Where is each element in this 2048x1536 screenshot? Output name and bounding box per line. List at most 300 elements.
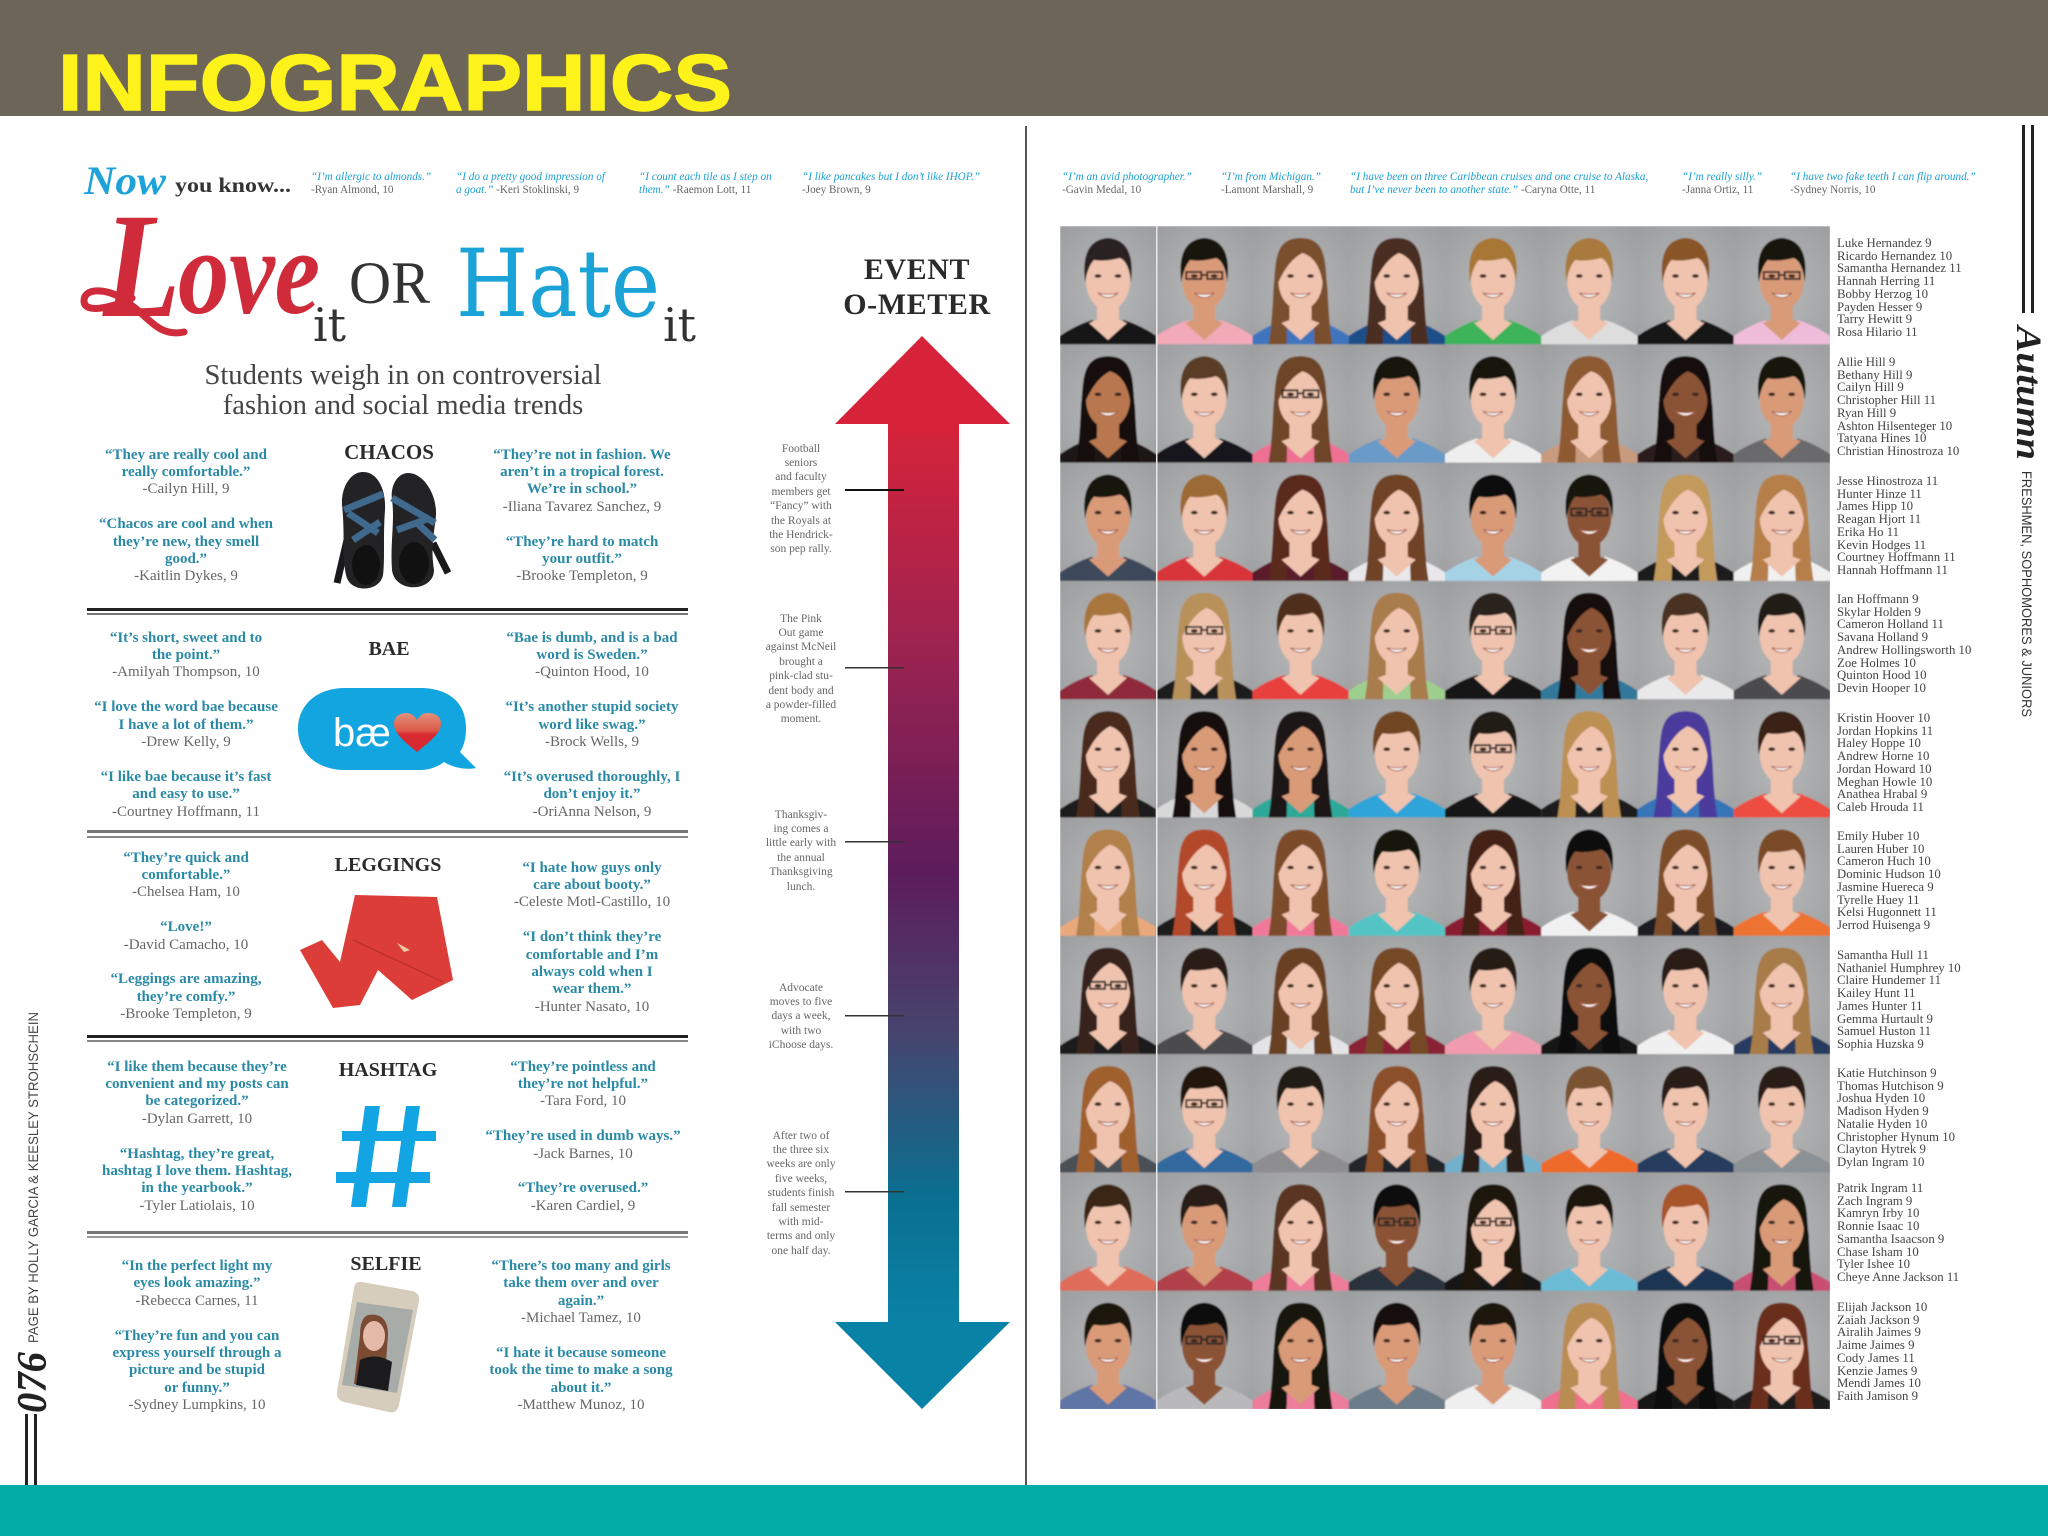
portrait: James Hipp bbox=[1252, 463, 1349, 582]
portrait: Meghan Howle bbox=[1541, 699, 1638, 818]
names row 8: Natalie Hyden 10 bbox=[1837, 1117, 1927, 1131]
names row 8: Christopher Hynum 10 bbox=[1837, 1130, 1955, 1144]
divider bbox=[87, 1035, 688, 1042]
fun fact: Caryna Otte bbox=[1350, 171, 1648, 196]
quotes love: selfie: eyes look amazing.” bbox=[133, 1275, 261, 1291]
names row 7: James Hunter 11 bbox=[1837, 999, 1923, 1013]
names row 2: Ashton Hilsenteger 10 bbox=[1837, 419, 1952, 433]
names row 3: Hunter Hinze 11 bbox=[1837, 487, 1922, 501]
quotes hate: selfie: again.” bbox=[558, 1293, 604, 1309]
names row 5: Anathea Hrabal 9 bbox=[1837, 787, 1927, 801]
portrait: Cameron Holland bbox=[1252, 581, 1349, 700]
quotes hate: chacos: “They’re hard to match bbox=[506, 534, 658, 550]
event note: semester: After two of bbox=[773, 1130, 829, 1142]
main title: Love it or Hate it bbox=[80, 210, 697, 352]
quotes love: chacos: -Cailyn Hill, 9 bbox=[142, 481, 230, 497]
names row 6: Jerrod Huisenga 9 bbox=[1837, 918, 1930, 932]
quotes hate: bae bbox=[504, 630, 680, 820]
quotes hate: chacos: -Brooke Templeton, 9 bbox=[516, 568, 648, 584]
fun fact: Joey Brown: “I like pancakes but I don’t like IHOP.” bbox=[802, 171, 980, 183]
names row 6: Jasmine Huereca 9 bbox=[1837, 880, 1934, 894]
portrait: Cody James bbox=[1445, 1291, 1542, 1410]
names row 4: Savana Holland 9 bbox=[1837, 630, 1928, 644]
names row 9: Zach Ingram 9 bbox=[1837, 1194, 1912, 1208]
names row 7: Claire Hundemer 11 bbox=[1837, 973, 1941, 987]
names row 3 bbox=[1837, 475, 1956, 577]
names row 8: Thomas Hutchison 9 bbox=[1837, 1079, 1944, 1093]
quotes hate: selfie: -Michael Tamez, 10 bbox=[521, 1310, 641, 1326]
portrait: Kailey Hunt bbox=[1349, 936, 1445, 1055]
names row 5: Meghan Howle 10 bbox=[1837, 775, 1932, 789]
portrait: Zoe Holmes bbox=[1541, 581, 1638, 700]
event note: thanksgiving: Thanksgiv- bbox=[775, 808, 827, 820]
divider bbox=[87, 830, 688, 838]
heading: now you know bbox=[83, 158, 291, 203]
names row 1: Luke Hernandez 9 bbox=[1837, 236, 1932, 250]
event note: semester: the three six bbox=[773, 1144, 829, 1156]
quotes love: hashtag: hashtag I love them. Hashtag, bbox=[102, 1163, 292, 1179]
names row 9: Tyler Ishee 10 bbox=[1837, 1257, 1910, 1271]
names row 7: Samuel Huston 11 bbox=[1837, 1024, 1931, 1038]
portrait: Ronnie Isaac bbox=[1349, 1172, 1445, 1291]
portrait: Devin Hooper bbox=[1734, 581, 1830, 700]
fun fact: Sydney Norris bbox=[1790, 171, 1976, 196]
fun fact: Lamont Marshall: -Lamont Marshall, 9 bbox=[1221, 184, 1313, 196]
event note: semester bbox=[766, 1130, 836, 1257]
names row 8: Madison Hyden 9 bbox=[1837, 1104, 1929, 1118]
names row 10: Kenzie James 9 bbox=[1837, 1364, 1917, 1378]
names row 3: Courtney Hoffmann 11 bbox=[1837, 550, 1956, 564]
quotes love: leggings: “They’re quick and bbox=[123, 850, 249, 866]
portrait: Dominic Hudson bbox=[1349, 818, 1445, 936]
quotes hate: leggings: care about booty.” bbox=[533, 877, 651, 893]
quotes hate: bae: “It’s another stupid society bbox=[506, 699, 678, 715]
names row 6 bbox=[1837, 830, 1941, 932]
portrait: Tatyana Hines bbox=[1638, 344, 1734, 463]
quotes love: bae: -Drew Kelly, 9 bbox=[141, 734, 231, 750]
event note: pink out: a powder-filled bbox=[766, 699, 836, 711]
event note: advocate bbox=[769, 982, 833, 1051]
event-o-meter arrow with ticks bbox=[835, 336, 1010, 1409]
names row 1: Ricardo Hernandez 10 bbox=[1837, 249, 1952, 263]
quotes hate: leggings: “I don’t think they’re bbox=[523, 929, 661, 945]
portrait: Jasmine Huereca bbox=[1445, 818, 1542, 936]
names row 9 bbox=[1837, 1182, 1959, 1284]
fun fact: Sydney Norris: -Sydney Norris, 10 bbox=[1790, 184, 1875, 196]
names row 1: Samantha Hernandez 11 bbox=[1837, 261, 1962, 275]
quotes hate: leggings bbox=[514, 860, 670, 1015]
quotes hate: hashtag: they’re not helpful.” bbox=[518, 1076, 648, 1092]
fun fact: Lamont Marshall: “I’m from Michigan.” bbox=[1221, 171, 1321, 183]
subtitle: fashion and social media trends bbox=[223, 390, 583, 421]
quotes love: chacos: good.” bbox=[165, 551, 207, 567]
heading: bae: BAE bbox=[368, 638, 410, 660]
names row 1: Payden Hesser 9 bbox=[1837, 300, 1922, 314]
quotes hate: leggings: -Celeste Motl-Castillo, 10 bbox=[514, 894, 670, 910]
main title: Love it or Hate it: OR bbox=[349, 250, 430, 316]
portrait: Jerrod Huisenga bbox=[1734, 818, 1830, 936]
names row 7: Sophia Huzska 9 bbox=[1837, 1037, 1924, 1051]
portrait: Ricardo Hernandez bbox=[1156, 226, 1253, 345]
event note: pep rally: and faculty bbox=[775, 471, 827, 483]
quotes hate: bae: -Quinton Hood, 10 bbox=[535, 664, 649, 680]
portrait: Clayton Hytrek bbox=[1638, 1054, 1734, 1173]
names row 9: Kamryn Irby 10 bbox=[1837, 1206, 1919, 1220]
names row 10: Cody James 11 bbox=[1837, 1351, 1915, 1365]
names row 10: Zaiah Jackson 9 bbox=[1837, 1313, 1919, 1327]
quotes hate: chacos: -Iliana Tavarez Sanchez, 9 bbox=[503, 499, 661, 515]
quotes love: hashtag: convenient and my posts can bbox=[105, 1076, 289, 1092]
quotes hate: bae: word like swag.” bbox=[538, 717, 646, 733]
quotes love: selfie: or funny.” bbox=[164, 1380, 230, 1396]
portrait: Dylan Ingram bbox=[1734, 1054, 1830, 1173]
names row 5: Jordan Howard 10 bbox=[1837, 762, 1932, 776]
portrait: Anathea Hrabal bbox=[1638, 699, 1734, 818]
event note: pep rally bbox=[769, 442, 833, 555]
quotes love: chacos bbox=[99, 446, 273, 584]
quotes love: chacos: “They are really cool and bbox=[105, 446, 267, 462]
portrait: Jaime Jaimes bbox=[1349, 1291, 1445, 1410]
quotes hate: bae: “Bae is dumb, and is a bad bbox=[506, 630, 678, 646]
portrait: Ian Hoffmann bbox=[1060, 581, 1157, 700]
divider bbox=[87, 608, 688, 615]
names row 1: Hannah Herring 11 bbox=[1837, 274, 1935, 288]
quotes hate: bae: -Brock Wells, 9 bbox=[545, 734, 639, 750]
event note: thanksgiving: ing comes a bbox=[774, 823, 828, 835]
quotes love: hashtag: “Hashtag, they’re great, bbox=[120, 1146, 274, 1162]
names row 2: Christopher Hill 11 bbox=[1837, 393, 1936, 407]
heading: leggings: LEGGINGS bbox=[335, 854, 441, 876]
quotes hate: hashtag: “They’re pointless and bbox=[510, 1058, 656, 1074]
event note: thanksgiving: Thanksgiving bbox=[769, 866, 833, 878]
quotes love: leggings: -Brooke Templeton, 9 bbox=[120, 1006, 252, 1022]
fun fact: Janna Ortiz: -Janna Ortiz, 11 bbox=[1682, 184, 1753, 196]
names row 3: Hannah Hoffmann 11 bbox=[1837, 563, 1948, 577]
portrait: Tarry Hewitt bbox=[1638, 226, 1734, 345]
main title: Love it or Hate it: it bbox=[663, 298, 697, 352]
quotes love: hashtag: in the yearbook.” bbox=[141, 1180, 253, 1196]
quotes hate: leggings: “I hate how guys only bbox=[522, 860, 662, 876]
quotes hate: hashtag: -Tara Ford, 10 bbox=[540, 1093, 626, 1109]
quotes hate: chacos: aren’t in a tropical forest. bbox=[500, 464, 664, 480]
portrait: Christopher Hynum bbox=[1541, 1054, 1638, 1173]
names row 10: Mendi James 10 bbox=[1837, 1376, 1921, 1390]
quotes hate: leggings: comfortable and I’m bbox=[526, 947, 658, 963]
portrait: Samantha Hernandez bbox=[1252, 226, 1349, 345]
quotes hate: chacos: We’re in school.” bbox=[527, 481, 637, 497]
names row 6: Cameron Huch 10 bbox=[1837, 854, 1931, 868]
quotes hate: hashtag: -Karen Cardiel, 9 bbox=[531, 1198, 635, 1214]
portrait: Sophia Huzska bbox=[1734, 936, 1830, 1055]
portrait: Skylar Holden bbox=[1156, 581, 1253, 700]
icon: selfie phone bbox=[336, 1282, 420, 1412]
portrait: Bobby Herzog bbox=[1445, 226, 1542, 345]
portrait: Hannah Herring bbox=[1349, 226, 1445, 345]
portrait: Kristin Hoover bbox=[1060, 699, 1157, 818]
names row 3: Kevin Hodges 11 bbox=[1837, 538, 1926, 552]
heading: event-o-meter bbox=[843, 253, 991, 321]
names row 7: Gemma Hurtault 9 bbox=[1837, 1012, 1933, 1026]
subtitle bbox=[204, 360, 602, 421]
event note: semester: students finish bbox=[768, 1187, 834, 1199]
portrait: Kelsi Hugonnett bbox=[1638, 818, 1734, 936]
main title: Love it or Hate it: it bbox=[313, 298, 347, 352]
portrait: Samantha Isaacson bbox=[1445, 1172, 1542, 1291]
names row 8: Katie Hutchinson 9 bbox=[1837, 1066, 1937, 1080]
portrait: Reagan Hjort bbox=[1349, 463, 1445, 582]
event note: advocate: moves to five bbox=[770, 996, 832, 1008]
fun fact: Keri Stoklinski bbox=[456, 171, 606, 196]
names row 7 bbox=[1837, 949, 1961, 1051]
heading: chacos: CHACOS bbox=[344, 440, 434, 464]
names row 9: Cheye Anne Jackson 11 bbox=[1837, 1270, 1959, 1284]
fun fact: Ryan Almond: “I’m allergic to almonds.” bbox=[311, 171, 431, 183]
event note: pep rally: “Fancy” with bbox=[770, 500, 832, 512]
portrait: Zach Ingram bbox=[1156, 1172, 1253, 1291]
quotes hate: leggings: always cold when I bbox=[531, 964, 653, 980]
footer bar bbox=[0, 1485, 2048, 1536]
quotes love: selfie bbox=[112, 1258, 282, 1413]
names row 9: Chase Isham 10 bbox=[1837, 1245, 1919, 1259]
subtitle: Students weigh in on controversial bbox=[204, 360, 602, 391]
quotes hate: selfie: “I hate it because someone bbox=[496, 1345, 666, 1361]
quotes hate: selfie: take them over and over bbox=[503, 1275, 659, 1291]
heading: now you know: Now bbox=[83, 158, 166, 203]
names row 6: Emily Huber 10 bbox=[1837, 829, 1919, 843]
portrait: Emily Huber bbox=[1060, 818, 1157, 936]
portrait: Jordan Hopkins bbox=[1156, 699, 1253, 818]
portrait: Faith Jamison bbox=[1734, 1291, 1830, 1410]
portrait: Nathaniel Humphrey bbox=[1156, 936, 1253, 1055]
portrait: Jordan Howard bbox=[1445, 699, 1542, 818]
event note: pink out: moment. bbox=[781, 713, 821, 725]
quotes love: selfie: express yourself through a bbox=[112, 1345, 282, 1361]
event note: pink out: dent body and bbox=[768, 685, 834, 697]
portrait: Erika Ho bbox=[1445, 463, 1542, 582]
quotes love: leggings: they’re comfy.” bbox=[137, 989, 235, 1005]
event note: thanksgiving: little early with bbox=[766, 837, 836, 849]
event note: pink out: brought a bbox=[779, 656, 823, 668]
names row 3: Jesse Hinostroza 11 bbox=[1837, 474, 1938, 488]
names row 9: Patrik Ingram 11 bbox=[1837, 1181, 1923, 1195]
header bar bbox=[0, 0, 2048, 116]
event note: thanksgiving bbox=[766, 808, 836, 893]
event note: advocate: with two bbox=[781, 1025, 821, 1037]
fun fact: Ryan Almond bbox=[311, 171, 431, 196]
fun fact: Ryan Almond: -Ryan Almond, 10 bbox=[311, 184, 394, 196]
event note: pink out: pink-clad stu- bbox=[769, 670, 833, 682]
portrait: Jesse Hinostroza bbox=[1060, 463, 1157, 582]
fun fact: Gavin Medal: “I’m an avid photographer.” bbox=[1062, 171, 1192, 183]
portrait: Haley Hoppe bbox=[1252, 699, 1349, 818]
fun fact: Janna Ortiz bbox=[1682, 171, 1762, 196]
event note: thanksgiving: the annual bbox=[777, 852, 825, 864]
main title: Love it or Hate it: Hate bbox=[456, 230, 660, 339]
names row 10: Jaime Jaimes 9 bbox=[1837, 1338, 1914, 1352]
names row 8 bbox=[1837, 1067, 1955, 1169]
names row 9: Ronnie Isaac 10 bbox=[1837, 1219, 1919, 1233]
portrait: Madison Hyden bbox=[1349, 1054, 1445, 1173]
quotes love: selfie: picture and be stupid bbox=[129, 1362, 265, 1378]
quotes love: leggings bbox=[111, 850, 261, 1022]
portrait: James Hunter bbox=[1445, 936, 1542, 1055]
portrait: Quinton Hood bbox=[1638, 581, 1734, 700]
names row 4: Cameron Holland 11 bbox=[1837, 617, 1944, 631]
quotes hate: bae: -OriAnna Nelson, 9 bbox=[533, 804, 651, 820]
event note: pep rally: son pep rally. bbox=[770, 543, 832, 555]
event note: pep rally: members get bbox=[771, 486, 831, 498]
section spine: Autumn bbox=[2005, 120, 2048, 730]
quotes love: chacos: -Kaitlin Dykes, 9 bbox=[134, 568, 238, 584]
heading: hashtag: HASHTAG bbox=[339, 1059, 437, 1081]
portrait: Gemma Hurtault bbox=[1541, 936, 1638, 1055]
portrait: Kevin Hodges bbox=[1541, 463, 1638, 582]
portrait: Ashton Hilsenteger bbox=[1541, 344, 1638, 463]
portrait: Caleb Hrouda bbox=[1734, 699, 1830, 818]
quotes hate: chacos bbox=[493, 446, 671, 584]
names row 2: Allie Hill 9 bbox=[1837, 355, 1895, 369]
portrait: Samantha Hull bbox=[1060, 936, 1157, 1055]
names row 7: Nathaniel Humphrey 10 bbox=[1837, 961, 1961, 975]
quotes hate: selfie: -Matthew Munoz, 10 bbox=[517, 1397, 645, 1413]
quotes hate: bae: “It’s overused thoroughly, I bbox=[504, 769, 680, 785]
fun fact: Raemon Lott bbox=[639, 171, 772, 196]
fun fact: Keri Stoklinski: a goat.” -Keri Stoklinski, 9 bbox=[456, 184, 579, 196]
event note: pep rally: the Hendrick- bbox=[769, 529, 833, 541]
names row 5 bbox=[1837, 712, 1933, 814]
page credit: 076 bbox=[10, 1352, 55, 1413]
names row 4: Andrew Hollingsworth 10 bbox=[1837, 643, 1971, 657]
portrait: Cheye Anne Jackson bbox=[1734, 1172, 1830, 1291]
portrait: Zaiah Jackson bbox=[1156, 1291, 1253, 1410]
names row 7: Samantha Hull 11 bbox=[1837, 948, 1929, 962]
page credit bbox=[10, 1012, 55, 1485]
portrait: Bethany Hill bbox=[1156, 344, 1253, 463]
event note: semester: five weeks, bbox=[775, 1173, 827, 1185]
quotes love: leggings: comfortable.” bbox=[142, 867, 230, 883]
names row 2 bbox=[1837, 356, 1959, 458]
names row 5: Jordan Hopkins 11 bbox=[1837, 724, 1933, 738]
portrait: Savana Holland bbox=[1349, 581, 1445, 700]
portrait: Claire Hundemer bbox=[1252, 936, 1349, 1055]
portrait: Patrik Ingram bbox=[1060, 1172, 1157, 1291]
names row 4: Zoe Holmes 10 bbox=[1837, 656, 1916, 670]
names row 4: Skylar Holden 9 bbox=[1837, 605, 1921, 619]
quotes love: chacos: they’re new, they smell bbox=[113, 534, 259, 550]
names row 1: Tarry Hewitt 9 bbox=[1837, 312, 1912, 326]
quotes hate: bae: don’t enjoy it.” bbox=[543, 786, 641, 802]
names row 2: Cailyn Hill 9 bbox=[1837, 380, 1904, 394]
quotes love: bae: “I like bae because it’s fast bbox=[101, 769, 271, 785]
portrait: Katie Hutchinson bbox=[1060, 1054, 1157, 1173]
quotes love: chacos: “Chacos are cool and when bbox=[99, 516, 273, 532]
portrait: Luke Hernandez bbox=[1060, 226, 1157, 345]
fun fact: Raemon Lott: “I count each tile as I step on bbox=[639, 171, 772, 183]
quotes love: leggings: -David Camacho, 10 bbox=[124, 937, 248, 953]
page credit: PAGE BY HOLLY GARCIA & KEESLEY STROHSCHEIN bbox=[26, 1012, 41, 1343]
center page divider bbox=[1025, 126, 1027, 1485]
event note: pink out: against McNeil bbox=[766, 641, 836, 653]
names row 6: Kelsi Hugonnett 11 bbox=[1837, 905, 1937, 919]
quotes hate: leggings: -Hunter Nasato, 10 bbox=[535, 999, 649, 1015]
portrait: Mendi James bbox=[1638, 1291, 1734, 1410]
portrait: Andrew Horne bbox=[1349, 699, 1445, 818]
quotes love: bae: “I love the word bae because bbox=[94, 699, 278, 715]
icon: bae text bubble: bæ bbox=[333, 711, 391, 755]
portrait: Kamryn Irby bbox=[1252, 1172, 1349, 1291]
names row 5: Andrew Horne 10 bbox=[1837, 749, 1929, 763]
quotes love: bae: and easy to use.” bbox=[132, 786, 240, 802]
portrait: Lauren Huber bbox=[1156, 818, 1253, 936]
quotes hate: hashtag bbox=[485, 1058, 681, 1214]
names row 8: Joshua Hyden 10 bbox=[1837, 1091, 1925, 1105]
quotes love: bae: I have a lot of them.” bbox=[118, 717, 254, 733]
quotes love: leggings: “Love!” bbox=[160, 919, 212, 935]
quotes hate: hashtag: “They’re used in dumb ways.” bbox=[485, 1128, 681, 1144]
names row 5: Kristin Hoover 10 bbox=[1837, 711, 1930, 725]
portrait: Christopher Hill bbox=[1349, 344, 1445, 463]
names row 4 bbox=[1837, 593, 1971, 695]
quotes love: selfie: -Rebecca Carnes, 11 bbox=[135, 1293, 259, 1309]
event note: pep rally: the Royals at bbox=[771, 515, 831, 527]
portrait: Hannah Hoffmann bbox=[1734, 463, 1830, 582]
portrait: Natalie Hyden bbox=[1445, 1054, 1542, 1173]
fun fact: Gavin Medal: -Gavin Medal, 10 bbox=[1062, 184, 1141, 196]
quotes hate: selfie: “There’s too many and girls bbox=[491, 1258, 671, 1274]
icon: red leggings bbox=[300, 895, 453, 1008]
portrait grid bbox=[1060, 226, 1830, 1409]
quotes hate: chacos: your outfit.” bbox=[542, 551, 622, 567]
names row 6: Dominic Hudson 10 bbox=[1837, 867, 1941, 881]
names row 6: Tyrelle Huey 11 bbox=[1837, 893, 1920, 907]
names row 4: Quinton Hood 10 bbox=[1837, 668, 1927, 682]
names row 2: Bethany Hill 9 bbox=[1837, 368, 1912, 382]
names row 5: Haley Hoppe 10 bbox=[1837, 736, 1921, 750]
event note: semester: terms and only bbox=[767, 1230, 835, 1242]
names row 1 bbox=[1837, 237, 1962, 339]
portrait: Ryan Hill bbox=[1445, 344, 1542, 463]
fun fact: Sydney Norris: “I have two fake teeth I can flip around.” bbox=[1790, 171, 1976, 183]
quotes love: chacos: really comfortable.” bbox=[122, 464, 250, 480]
heading: event-o-meter: EVENT bbox=[864, 253, 970, 286]
names row 10 bbox=[1837, 1301, 1927, 1403]
quotes love: hashtag: -Tyler Latiolais, 10 bbox=[139, 1198, 255, 1214]
names row 6: Lauren Huber 10 bbox=[1837, 842, 1924, 856]
names row 1: Rosa Hilario 11 bbox=[1837, 325, 1918, 339]
event note: semester: one half day. bbox=[772, 1245, 830, 1257]
portrait: Chase Isham bbox=[1541, 1172, 1638, 1291]
names row 4: Devin Hooper 10 bbox=[1837, 681, 1926, 695]
quotes love: bae bbox=[94, 630, 278, 820]
event note: semester: fall semester bbox=[772, 1202, 830, 1214]
event note: pink out bbox=[766, 612, 836, 725]
event note: semester: with mid- bbox=[778, 1216, 824, 1228]
divider bbox=[87, 1231, 688, 1238]
event note: advocate: iChoose days. bbox=[769, 1039, 833, 1051]
names row 2: Tatyana Hines 10 bbox=[1837, 431, 1926, 445]
fun fact: Caryna Otte: but I’ve never been to another state.” -Caryna Otte, 11 bbox=[1350, 184, 1595, 196]
quotes love: hashtag bbox=[102, 1058, 292, 1214]
quotes hate: selfie: took the time to make a song bbox=[489, 1362, 673, 1378]
quotes love: bae: -Courtney Hoffmann, 11 bbox=[112, 804, 260, 820]
portrait: Andrew Hollingsworth bbox=[1445, 581, 1542, 700]
names row 8: Dylan Ingram 10 bbox=[1837, 1155, 1924, 1169]
heading: event-o-meter: O-METER bbox=[843, 288, 991, 321]
fun fact: Raemon Lott: them.” -Raemon Lott, 11 bbox=[639, 184, 751, 196]
quotes hate: bae: word is Sweden.” bbox=[536, 647, 648, 663]
portrait: Payden Hesser bbox=[1541, 226, 1638, 345]
quotes love: selfie: “In the perfect light my bbox=[122, 1258, 272, 1274]
